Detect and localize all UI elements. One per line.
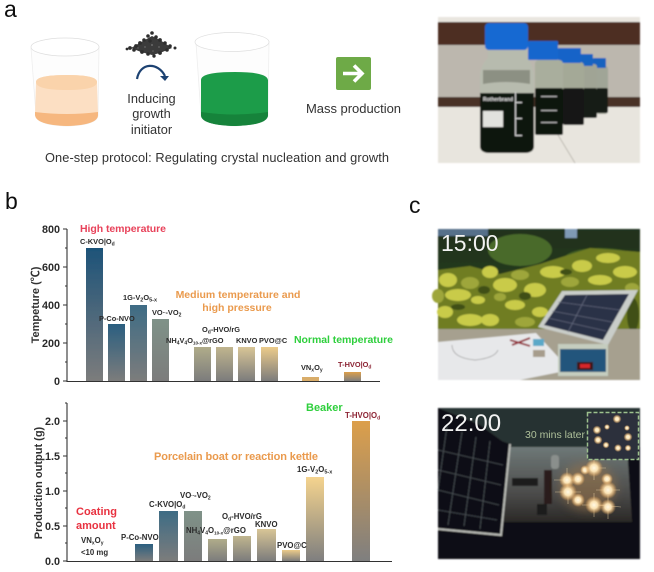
bar labels: NH <box>166 336 177 345</box>
bar labels: VN <box>81 536 92 545</box>
bar labels: x <box>92 540 95 546</box>
bar labels: 4 <box>205 530 208 536</box>
bar labels: -HVO/rG <box>231 512 262 521</box>
bar labels: VO <box>152 308 163 317</box>
bar labels: y <box>101 540 104 546</box>
bar labels: 2 <box>315 470 318 476</box>
y axis title: temperature: Tempeture (℃) <box>30 266 42 343</box>
bar labels: .. <box>191 492 195 498</box>
bar labels: 2 <box>179 312 182 318</box>
bar labels: KNVO <box>236 336 258 345</box>
icon: beaker with orange solution <box>31 38 99 126</box>
bar labels: d <box>112 242 115 248</box>
category: beaker: Beaker <box>306 402 343 414</box>
icon: green arrow button <box>336 57 371 90</box>
bars <box>86 248 361 381</box>
bar labels: 1G-V <box>123 293 140 302</box>
bar labels: V <box>200 526 206 535</box>
bar chart: temperature <box>30 223 393 388</box>
bar labels: 4 <box>184 340 187 346</box>
bar labels: 4 <box>177 340 180 346</box>
bar labels: y <box>320 368 323 374</box>
category: porcelain boat or reaction kettle: Porcelain boat or reaction kettle <box>154 451 318 463</box>
bar labels: KNVO <box>255 520 278 529</box>
y tick labels <box>42 224 60 388</box>
bar labels: O <box>314 363 320 372</box>
bar labels: C-KVO|O <box>80 237 112 246</box>
bar labels: T-HVO|O <box>338 360 368 369</box>
category: coating amount: amount <box>76 520 116 532</box>
bar labels: 1G-V <box>297 465 315 474</box>
bar labels: 2 <box>208 496 211 502</box>
y tick labels: 1.0 <box>45 486 60 498</box>
bar labels: O <box>318 465 324 474</box>
y tick labels: 0.5 <box>45 521 60 533</box>
y tick labels: 1.5 <box>45 451 60 463</box>
icon: black powder pile <box>126 31 176 58</box>
bar labels: d <box>208 330 211 336</box>
y axis and ticks <box>63 229 380 382</box>
bar chart: production output <box>33 402 392 568</box>
photo: five bottles of dark solution <box>438 17 640 163</box>
text: time 22:00: 22:00 <box>441 410 501 437</box>
bar labels: NH <box>186 526 197 535</box>
bar labels: d <box>377 416 380 422</box>
category: medium temperature and high pressure: high pressure <box>202 302 272 314</box>
text: inducing growth initiator: Inducing <box>127 91 176 106</box>
y tick labels: 800 <box>42 224 60 236</box>
bar labels: P-Co-NVO <box>121 533 159 542</box>
bar labels: -VO <box>165 308 179 317</box>
text: mass production: Mass production <box>306 101 401 116</box>
y axis and ticks <box>63 403 392 562</box>
bar labels: 5-x <box>324 470 333 476</box>
bar labels: d <box>368 364 371 370</box>
text: 30 mins later: 30 mins later <box>525 429 586 441</box>
bar labels: x <box>311 368 314 374</box>
y tick labels: 0 <box>54 376 60 388</box>
category: medium temperature and high pressure: Medium temperature and <box>176 289 300 301</box>
panel: a synthesis protocol <box>4 0 401 165</box>
bar labels: O <box>95 536 101 545</box>
bar labels: 5-x <box>149 298 158 304</box>
text: time 15:00: 15:00 <box>441 230 499 256</box>
panel label b: b <box>5 188 18 214</box>
bar labels: -HVO/rG <box>211 325 240 334</box>
bar labels <box>81 411 380 557</box>
icon: beaker with green solution <box>195 32 269 126</box>
bar labels <box>80 237 371 374</box>
category: normal temperature: Normal temperature <box>294 334 393 346</box>
bar labels: .. <box>163 309 166 315</box>
category: high temperature: High temperature <box>80 223 166 235</box>
bar labels: @rGO <box>223 526 246 535</box>
bar labels: PVO@C <box>277 541 307 550</box>
y axis title: production output: Production output (g) <box>33 426 45 539</box>
bar labels: 10-x <box>193 340 202 346</box>
bars <box>135 421 370 561</box>
bar labels: @rGO <box>202 336 224 345</box>
bar labels: V <box>179 336 184 345</box>
text: inducing growth initiator: growth <box>132 106 171 121</box>
bar labels: P-Co-NVO <box>99 314 135 323</box>
y tick labels: 200 <box>42 338 60 350</box>
bar labels: T-HVO|O <box>345 411 377 420</box>
bar labels: d <box>182 504 185 510</box>
y tick labels <box>45 416 60 568</box>
icon: curved arrow <box>137 66 169 81</box>
bar labels: -VO <box>194 491 208 500</box>
y tick labels: 400 <box>42 300 60 312</box>
panel: b charts <box>5 188 393 568</box>
bar labels: VO <box>180 491 191 500</box>
y tick labels: 2.0 <box>45 416 60 428</box>
bar labels: 2 <box>140 298 143 304</box>
bar labels: <10 mg <box>81 548 108 557</box>
y tick labels: 600 <box>42 262 60 274</box>
bar labels: 10-x <box>214 530 224 536</box>
text: protocol caption: One-step protocol: Regulating crystal nucleation and growth <box>45 150 389 165</box>
bar labels: O <box>208 526 214 535</box>
text: bottle label: Rotherbrand <box>483 97 513 103</box>
text: inducing growth initiator: initiator <box>131 122 173 137</box>
bar labels: PVO@C <box>259 336 288 345</box>
bar labels: O <box>143 293 149 302</box>
bar labels: 4 <box>197 530 200 536</box>
y tick labels: 0.0 <box>45 556 60 568</box>
bar labels: VN <box>301 363 311 372</box>
panel label c: c <box>409 192 420 218</box>
bar labels: d <box>228 516 231 522</box>
bar labels: C-KVO|O <box>149 500 182 509</box>
bar labels: O <box>187 336 193 345</box>
bar labels: O <box>202 325 208 334</box>
inset: lights 30 mins later <box>588 412 638 460</box>
bar labels: O <box>222 512 228 521</box>
lights glowing in heart shape <box>554 456 621 519</box>
category: coating amount: Coating <box>76 506 117 518</box>
photo: lights at 22:00 <box>438 408 640 559</box>
photo: solar panel at 15:00 <box>432 229 640 380</box>
